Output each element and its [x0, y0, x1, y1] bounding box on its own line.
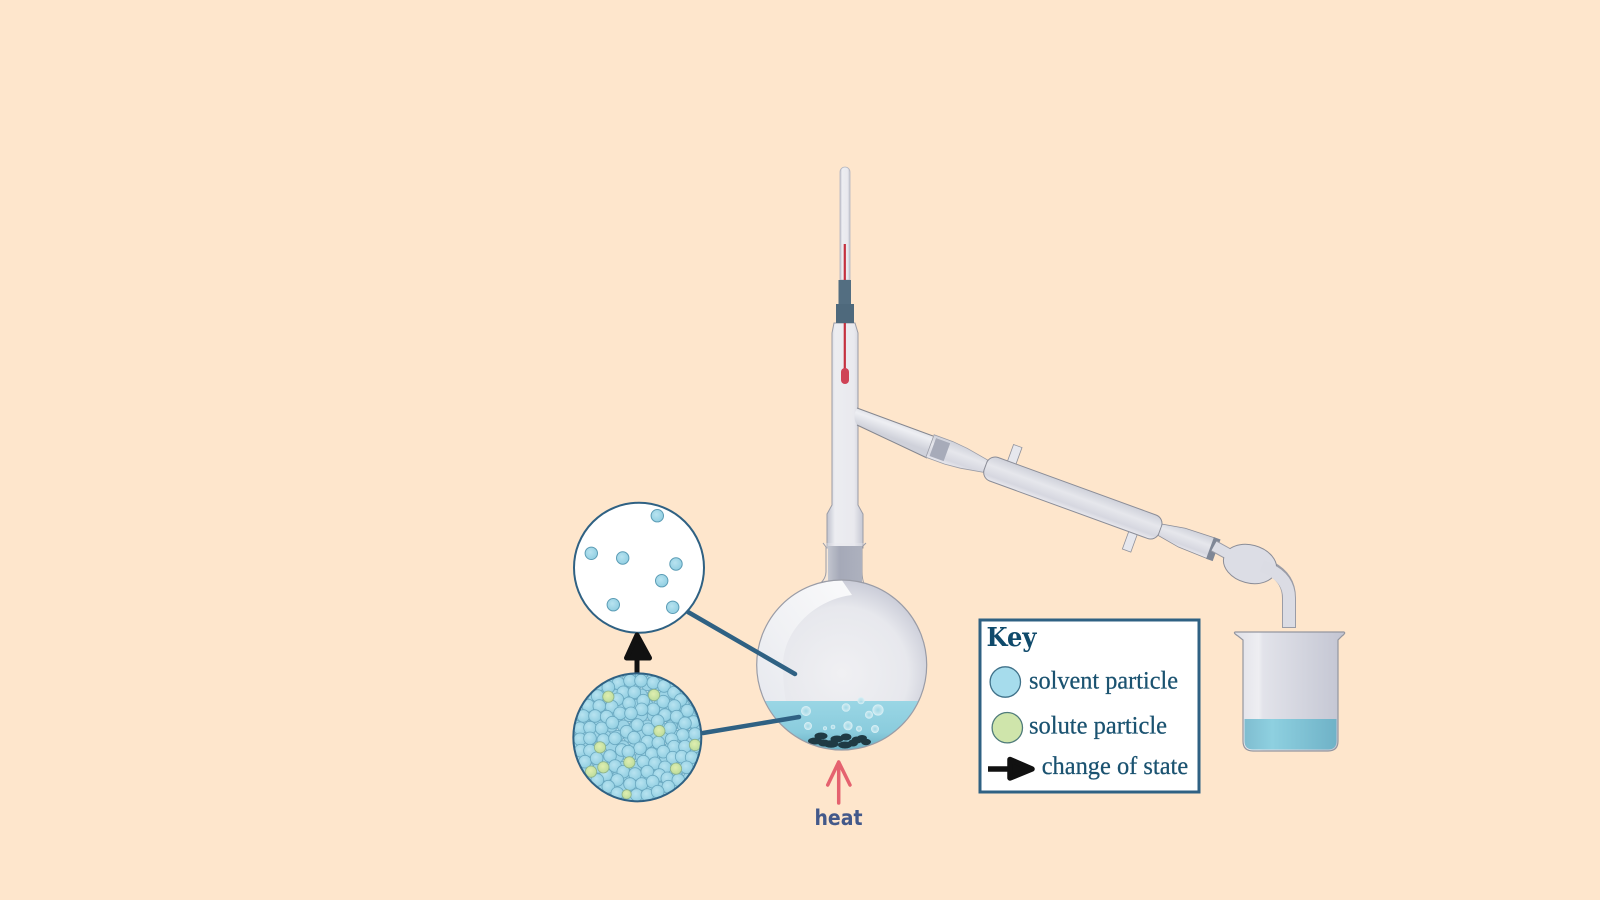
packed particles	[574, 674, 701, 801]
grey ground-glass sleeve	[930, 438, 950, 461]
key panel	[980, 620, 1199, 792]
outlet cone	[1156, 519, 1215, 559]
flask liquid	[766, 701, 918, 750]
key: solute particle	[992, 712, 1167, 743]
heat label: heat	[814, 806, 862, 830]
callout line: liquid	[703, 717, 799, 733]
particle circle: liquid	[573, 673, 701, 801]
condenser body	[981, 454, 1164, 542]
key: solute particle: solute particle	[1029, 712, 1167, 740]
heat arrow	[828, 762, 850, 803]
flask outline	[757, 580, 927, 750]
flask neck	[820, 543, 866, 584]
lower outlet stub	[1122, 529, 1138, 552]
side arm edges	[857, 408, 933, 458]
side arm	[854, 408, 933, 458]
key title: Key	[986, 623, 1037, 653]
particle circle: gas	[574, 503, 704, 633]
flask body	[757, 580, 927, 750]
callout line: vapour	[688, 612, 795, 674]
thermometer stopper	[836, 280, 854, 323]
collected distillate	[1244, 719, 1336, 750]
lens outline	[573, 673, 701, 801]
bubbles	[801, 697, 883, 733]
ground-glass joint	[828, 546, 862, 583]
key: solvent particle	[990, 667, 1178, 697]
distillation apparatus	[750, 167, 1345, 753]
flask highlight	[757, 580, 852, 701]
collecting adapter tube	[1214, 539, 1289, 628]
key: change of state: change of state	[1042, 753, 1188, 780]
solvent particles	[585, 510, 682, 614]
condenser assembly	[919, 418, 1227, 579]
thermometer upper stem	[840, 167, 850, 280]
beaker	[1234, 632, 1345, 751]
round-bottom flask	[750, 543, 930, 753]
grey band	[1206, 537, 1221, 561]
vertical still head tube	[827, 323, 863, 548]
upper inlet stub	[1007, 444, 1022, 466]
key: solvent particle: solvent particle	[1029, 668, 1178, 694]
solute particles	[585, 689, 701, 799]
thermometer liquid and bulb	[841, 323, 849, 384]
cone joint	[926, 435, 990, 477]
arrow: change of state up	[626, 635, 650, 673]
boiling chips	[808, 732, 871, 748]
